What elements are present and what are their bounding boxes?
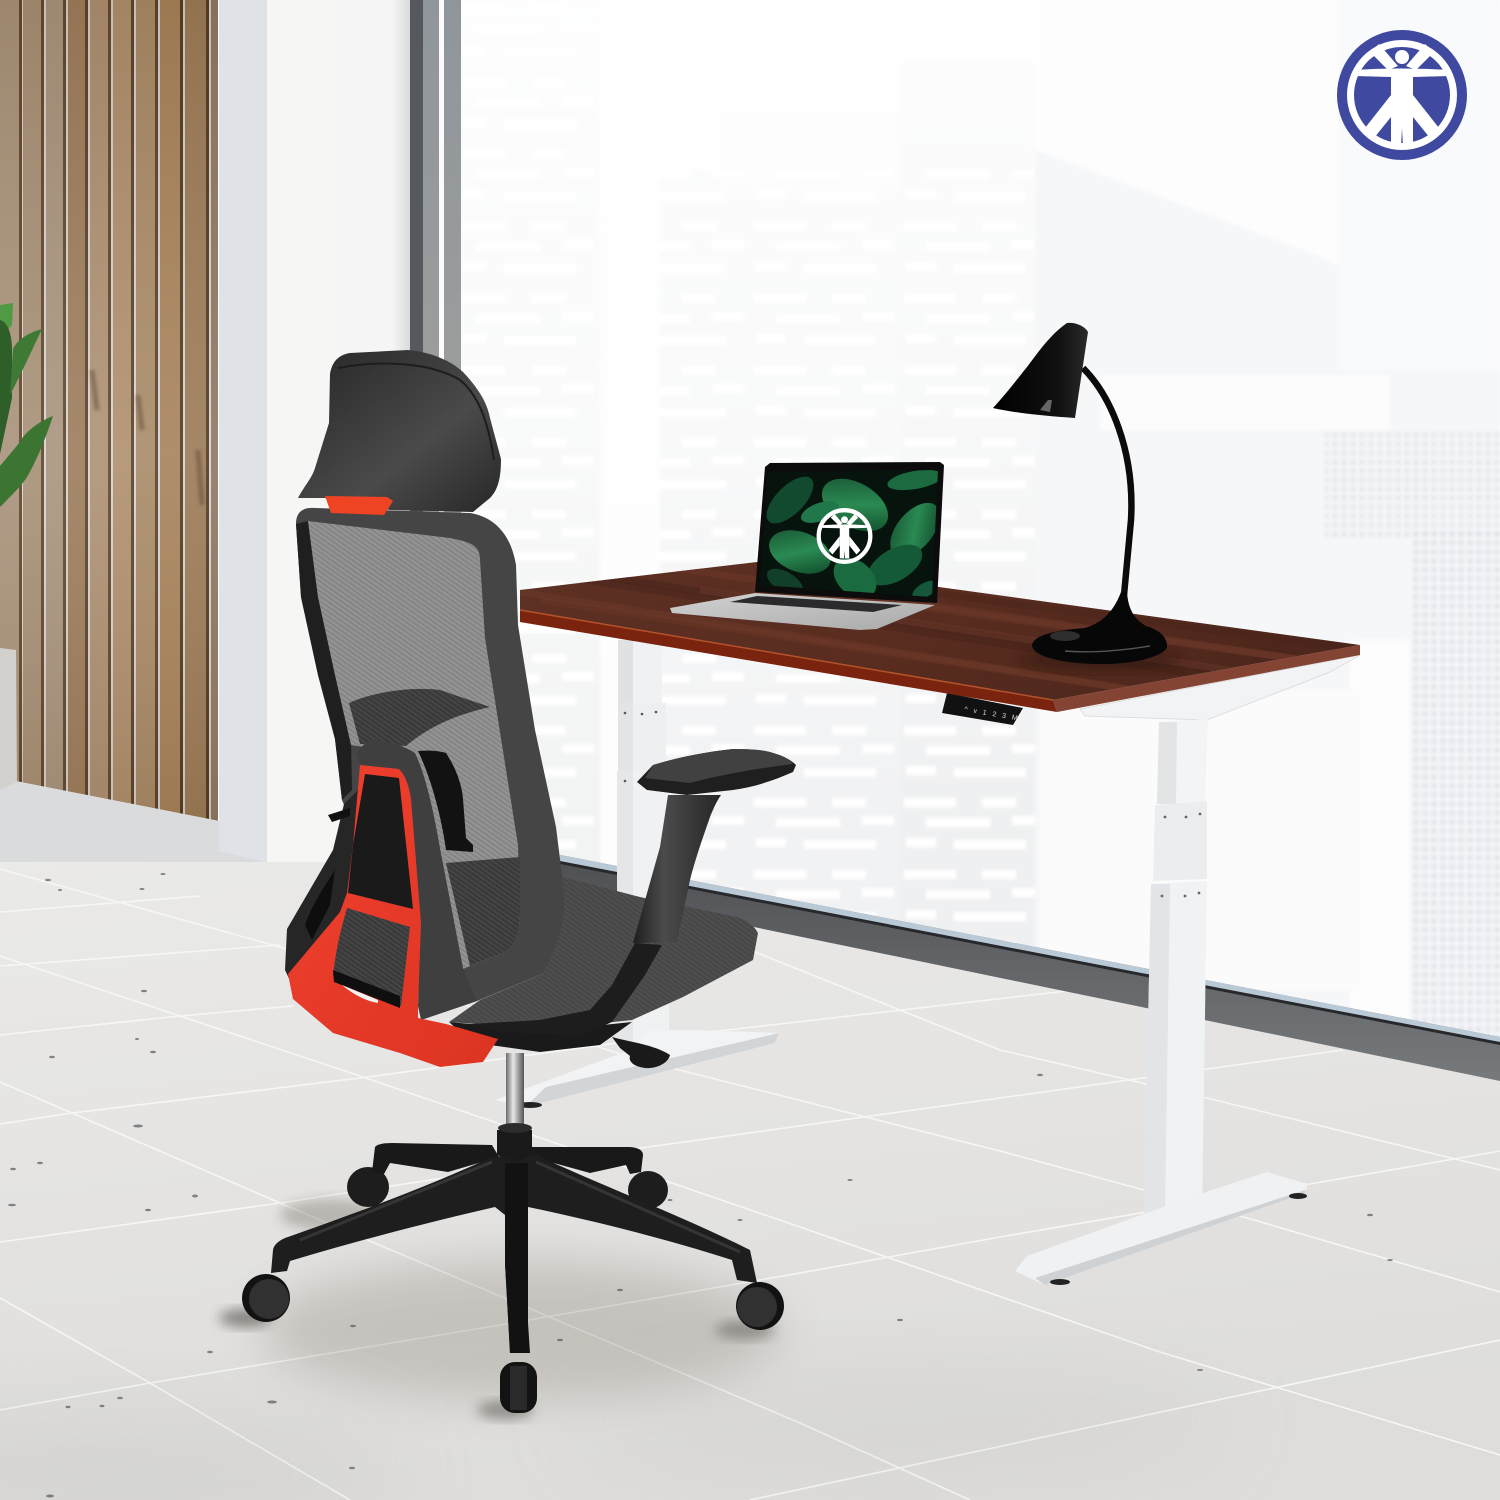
lever (612, 1037, 670, 1068)
red shell (288, 765, 498, 1067)
logo on screen (819, 510, 870, 562)
front right caster (736, 1282, 784, 1330)
side wing (285, 790, 358, 985)
headrest (298, 350, 501, 512)
lamp arm (1083, 368, 1131, 595)
red shell opening (333, 908, 410, 1006)
lumbar support (418, 751, 473, 852)
wall column (219, 0, 267, 862)
laptop lid (755, 462, 944, 603)
back mesh (308, 521, 520, 969)
mesh dark band (349, 689, 490, 746)
plant pot (0, 648, 17, 790)
plant (0, 303, 53, 790)
window view with city buildings (516, 153, 1500, 1037)
right desk leg (1015, 655, 1360, 1285)
laptop base (670, 593, 935, 630)
rear casters (347, 1167, 668, 1209)
logo figure (1354, 44, 1450, 147)
back frame (296, 508, 564, 1020)
frame left edge (296, 521, 352, 800)
floor shadows (0, 1199, 1230, 1500)
floor tile joints (0, 869, 1500, 1500)
front caster (500, 1362, 537, 1413)
brand logo (1337, 30, 1467, 160)
wooden slat panel (0, 0, 218, 830)
seat underside (449, 1022, 632, 1052)
control panel: ^ v 1 2 3 M (964, 706, 1020, 723)
desk lamp (993, 323, 1180, 670)
armrest stem (633, 795, 721, 943)
window frame (410, 0, 461, 880)
white wall (267, 0, 410, 862)
cylinder collar (497, 1130, 532, 1162)
laptop screen leaves (766, 470, 938, 597)
lower mesh (446, 857, 520, 966)
orange headrest clip (325, 496, 393, 515)
floor speckles (8, 873, 1393, 1498)
gas cylinder (506, 1053, 524, 1128)
lamp shade (993, 323, 1088, 418)
standing desk (495, 560, 1360, 1285)
laptop (670, 462, 949, 630)
left desk leg (495, 640, 779, 1108)
seat (449, 877, 758, 1029)
window base frame (560, 855, 1500, 1081)
lumbar frame (356, 739, 477, 1020)
control panel (942, 693, 1023, 725)
armrest pad (637, 749, 796, 795)
desk top (520, 560, 1360, 726)
office chair (242, 350, 796, 1413)
floor under wood panel (0, 778, 267, 862)
front left caster (242, 1274, 290, 1322)
red shell panel (348, 774, 413, 909)
lamp base (1032, 592, 1167, 664)
floor (0, 778, 1500, 1500)
chair star base (242, 1037, 784, 1413)
